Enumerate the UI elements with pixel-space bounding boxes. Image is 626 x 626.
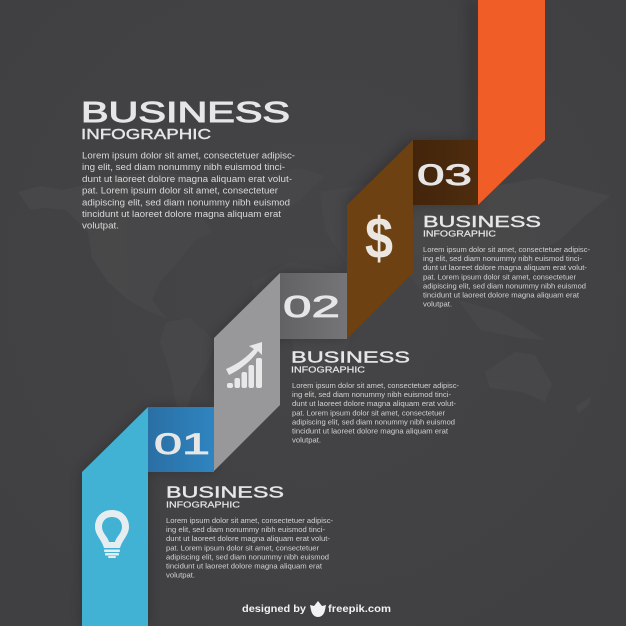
section 02 text: tincidunt ut laoreet dolore magna aliquam erat — [292, 428, 448, 436]
intro text block: adipiscing elit, sed diam nonummy nibh euismod — [82, 197, 290, 207]
ribbon step 2: grey fold — [214, 273, 280, 471]
ribbon step 2: number panel — [280, 273, 347, 339]
section 02 text: Lorem ipsum dolor sit amet, consectetuer adipisc- — [292, 383, 459, 390]
section 02 text: adipiscing elit, sed diam nonummy nibh euismod — [292, 419, 455, 426]
section 01 text: INFOGRAPHIC — [166, 500, 240, 510]
section 02 text: BUSINESS — [291, 350, 410, 366]
intro text block: volutpat. — [82, 221, 119, 231]
section 02 text: volutpat. — [292, 438, 321, 445]
icon: light bulb — [95, 510, 129, 558]
title — [81, 97, 290, 143]
section 03 text: BUSINESS — [423, 214, 541, 231]
section 03 text — [423, 214, 590, 309]
section 01 text: Lorem ipsum dolor sit amet, consectetuer adipisc- — [166, 518, 333, 525]
intro text block: dunt ut laoreet dolore magna aliquam erat volut- — [82, 174, 292, 184]
freepik credit: freepik.com — [328, 603, 391, 615]
ribbon step 3: number panel — [413, 140, 478, 205]
intro text block — [82, 150, 295, 231]
section 02 text — [291, 350, 459, 445]
intro text block: pat. Lorem ipsum dolor sit amet, consectetuer — [82, 186, 278, 196]
section 03 text: Lorem ipsum dolor sit amet, consectetuer adipisc- — [423, 247, 590, 254]
section 03 text: INFOGRAPHIC — [423, 228, 496, 238]
icon: growth chart with arrow — [226, 342, 262, 388]
number 03: 03 — [417, 159, 472, 192]
title: BUSINESS — [81, 97, 290, 129]
ribbon shadows — [82, 0, 478, 626]
section 01 text — [166, 484, 333, 580]
intro text block: ing elit, sed diam nonummy nibh euismod tinci- — [82, 162, 285, 172]
ribbon step 3: orange band — [478, 0, 545, 205]
section 02 text: ing elit, sed diam nonummy nibh euismod tinci- — [292, 392, 451, 399]
section 03 text: ing elit, sed diam nonummy nibh euismod tinci- — [423, 256, 582, 263]
title: INFOGRAPHIC — [81, 126, 211, 143]
section 02 text: dunt ut laoreet dolore magna aliquam erat volut- — [292, 401, 456, 408]
section 03 text: dunt ut laoreet dolore magna aliquam erat volut- — [423, 265, 587, 272]
section 01 text: BUSINESS — [166, 484, 284, 502]
number 01: 01 — [154, 428, 210, 461]
intro text block: Lorem ipsum dolor sit amet, consectetuer adipisc- — [82, 150, 295, 160]
freepik credit — [242, 601, 391, 617]
section 01 text: adipiscing elit, sed diam nonummy nibh euismod — [166, 554, 329, 561]
section 01 text: volutpat. — [166, 573, 195, 580]
section 03 text: adipiscing elit, sed diam nonummy nibh euismod — [423, 283, 586, 290]
icon: dollar sign: $ — [365, 206, 393, 271]
section 02 text: INFOGRAPHIC — [291, 364, 365, 374]
section 03 text: volutpat. — [423, 302, 452, 309]
ribbon step 3: brown fold — [347, 140, 413, 339]
intro text block: tincidunt ut laoreet dolore magna aliquam erat — [82, 209, 282, 219]
section 01 text: ing elit, sed diam nonummy nibh euismod tinci- — [166, 527, 325, 534]
section 03 text: pat. Lorem ipsum dolor sit amet, consectetuer — [423, 274, 577, 281]
ribbon step 1: teal fold — [82, 407, 148, 626]
section 02 text: pat. Lorem ipsum dolor sit amet, consectetuer — [292, 410, 446, 417]
section 01 text: tincidunt ut laoreet dolore magna aliquam erat — [166, 564, 322, 570]
ribbon step 1: number panel — [148, 407, 214, 472]
section 01 text: pat. Lorem ipsum dolor sit amet, consectetuer — [166, 545, 320, 552]
world map — [18, 168, 610, 424]
number 02: 02 — [283, 289, 340, 324]
section 03 text: tincidunt ut laoreet dolore magna aliquam erat — [423, 292, 579, 300]
section 01 text: dunt ut laoreet dolore magna aliquam erat volut- — [166, 536, 330, 543]
freepik credit: designed by — [242, 603, 306, 615]
